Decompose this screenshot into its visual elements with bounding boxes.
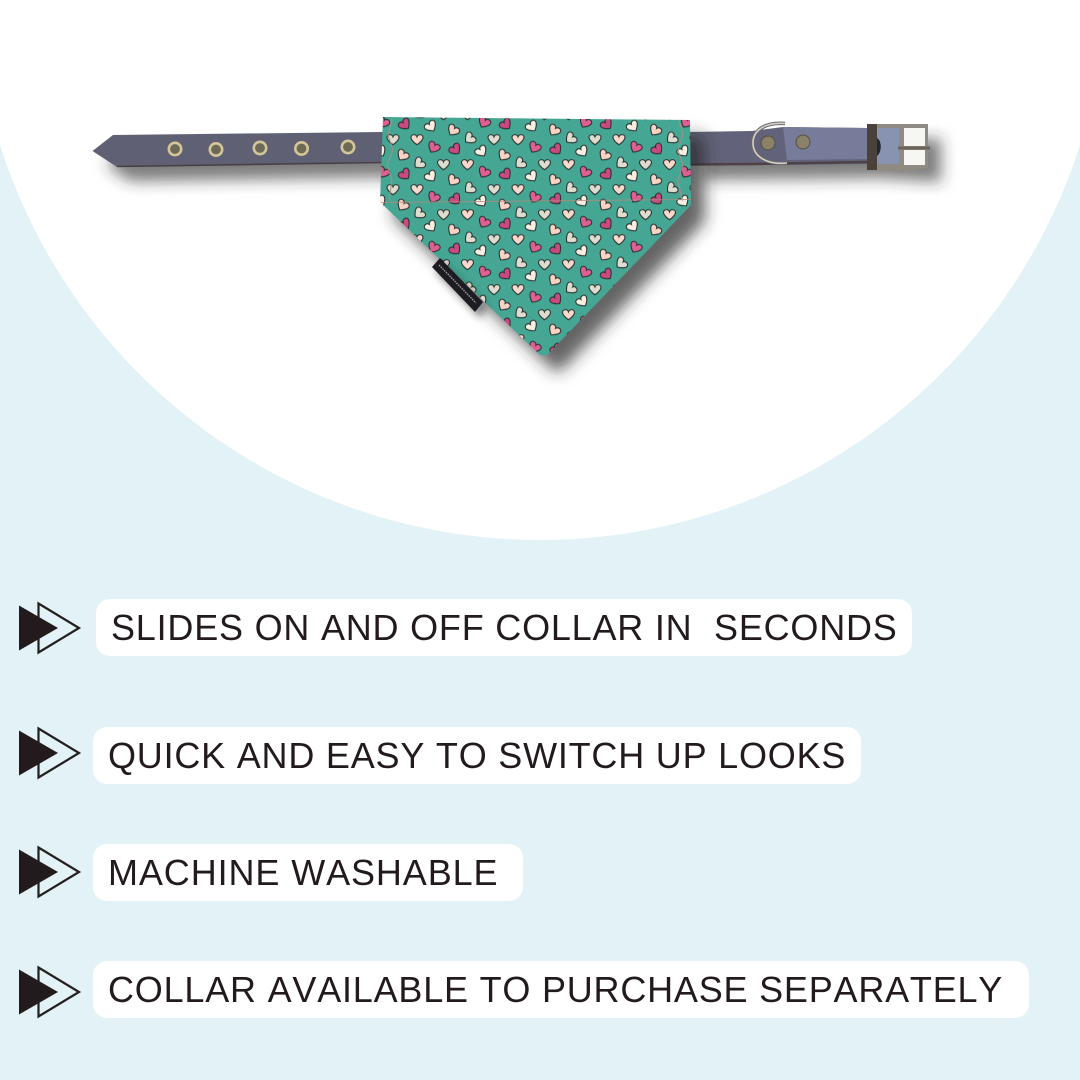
black bandana tag: [432, 258, 483, 312]
label pill: [93, 844, 523, 901]
arrow icon: [19, 846, 81, 898]
feature row 1: [19, 599, 912, 656]
rivets: [761, 135, 810, 150]
bandana with heart print: [380, 117, 691, 356]
arrow icon: [19, 966, 81, 1018]
label pill: [96, 599, 912, 656]
white circle backdrop: [0, 0, 1080, 540]
buckle: [867, 124, 930, 171]
D ring: [753, 123, 787, 163]
eyelets: [169, 141, 354, 156]
label pill: COLLAR AVAILABLE TO PURCHASE SEPARATELY: [108, 969, 1003, 1010]
label pill: [93, 961, 1029, 1018]
label pill: SLIDES ON AND OFF COLLAR IN SECONDS: [111, 607, 898, 648]
arrow icon: [19, 602, 81, 654]
label pill: [93, 727, 861, 784]
feature row 3: [19, 844, 523, 901]
arrow icon: [19, 726, 81, 780]
feature row 2: [19, 726, 861, 784]
collar strap, tip end: [92, 132, 383, 167]
label pill: MACHINE WASHABLE: [108, 852, 498, 893]
label pill: QUICK AND EASY TO SWITCH UP LOOKS: [108, 735, 846, 776]
collar strap, buckle end: [688, 124, 928, 168]
feature row 4: [19, 961, 1029, 1018]
product photo: collar with bandana: [92, 117, 952, 382]
